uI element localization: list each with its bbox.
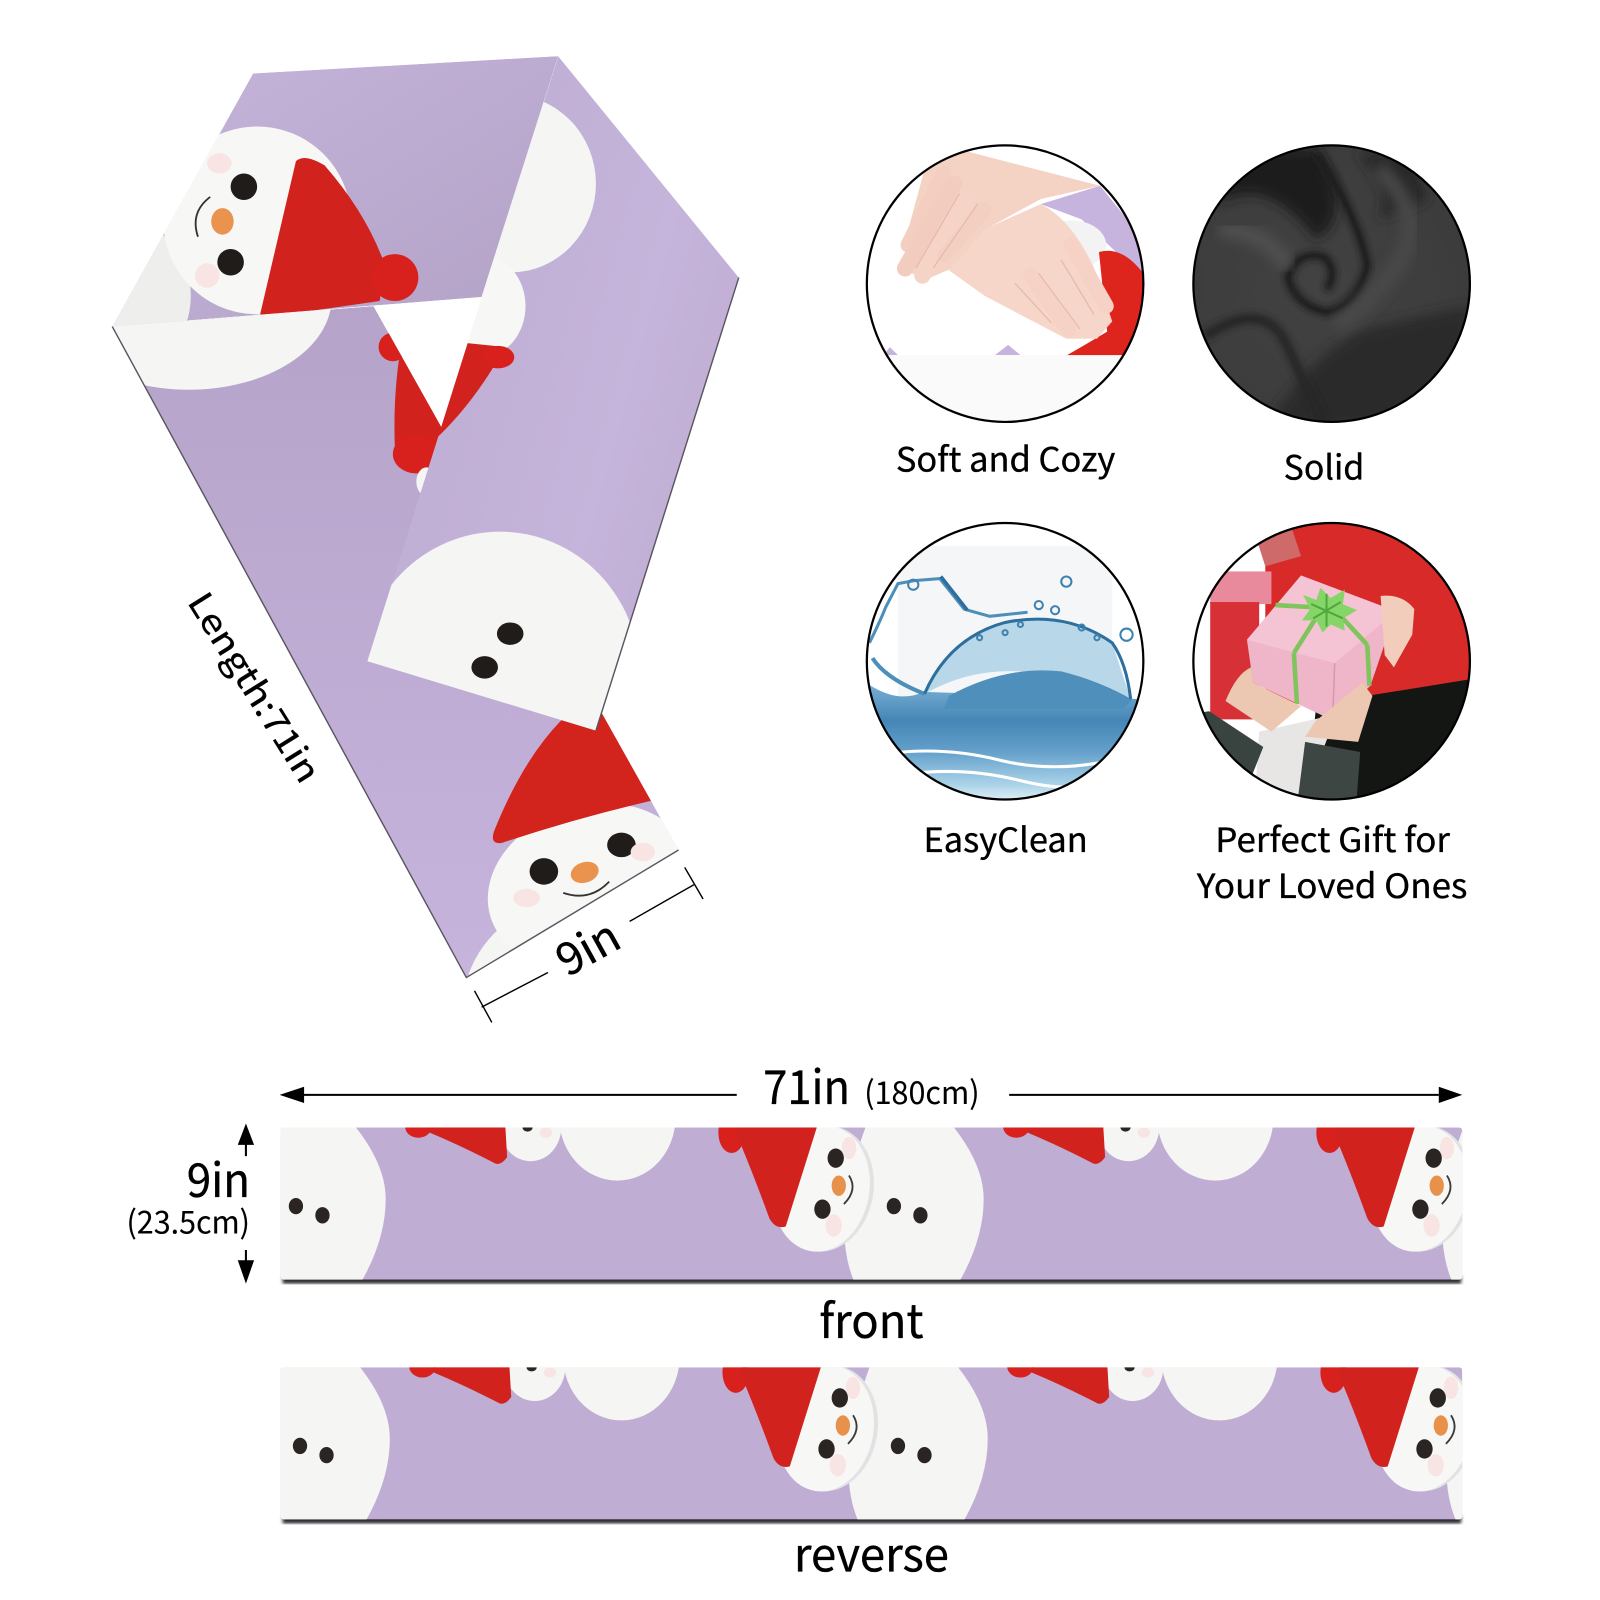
caption: soft and cozy: Soft and Cozy	[896, 432, 1116, 481]
caption: solid: Solid	[1284, 441, 1364, 490]
reverse label: reverse	[794, 1517, 949, 1585]
feature: soft and cozy circle	[862, 143, 1148, 432]
width dimension: 9in	[474, 867, 703, 1022]
length label: Length:71in	[178, 581, 334, 791]
height arrows and label: 9in	[187, 1143, 250, 1211]
length arrow and label: 71in	[763, 1050, 850, 1118]
scarf right panel	[368, 56, 738, 730]
panel: folded scarf illustration	[112, 56, 740, 978]
width dimension: 9in: 9in	[542, 901, 630, 989]
front label: front	[819, 1284, 924, 1352]
caption: easy clean: EasyClean	[923, 813, 1088, 862]
feature: perfect gift circle	[1189, 520, 1474, 806]
scarf edge shadows	[112, 278, 739, 978]
caption: perfect gift	[1196, 813, 1467, 908]
front strip	[280, 1128, 1464, 1284]
height arrows and label	[127, 1123, 254, 1284]
feature: solid fabric circle	[1189, 143, 1474, 429]
caption: perfect gift: Perfect Gift for	[1215, 813, 1451, 862]
scarf top panel	[112, 56, 558, 326]
feature: easy clean water circle	[862, 520, 1148, 806]
scarf long panel	[114, 306, 678, 976]
reverse strip	[280, 1367, 1464, 1524]
caption: perfect gift: Your Loved Ones	[1196, 859, 1467, 908]
length arrow and label: (180cm)	[864, 1068, 980, 1114]
length arrow and label	[280, 1050, 1462, 1118]
height arrows and label: (23.5cm)	[127, 1198, 250, 1244]
